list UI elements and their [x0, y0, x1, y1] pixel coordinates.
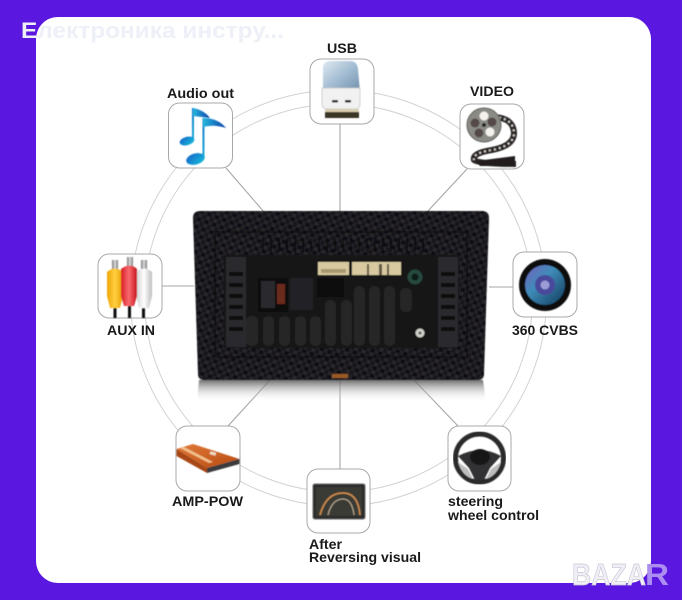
left clip column: [226, 257, 246, 347]
card: AMP-POW: [172, 426, 244, 509]
card: After Reversing visual: [307, 469, 421, 565]
antenna round jack: [408, 270, 422, 284]
concentric connection rings: [130, 90, 546, 506]
icon: USB stick: [322, 61, 360, 118]
card: USB: [310, 40, 374, 124]
cable clips: [246, 286, 412, 346]
coax socket: [416, 328, 424, 338]
label: AUX IN: AUX IN: [107, 322, 155, 338]
right clip column: [438, 257, 458, 347]
watermark: Bazar logo: R: [645, 557, 669, 592]
icon: steering wheel: [456, 434, 504, 482]
card: steering wheel control: [447, 426, 539, 523]
small square port: [317, 278, 344, 297]
icon: music notes: [179, 108, 226, 167]
card: VIDEO: [460, 83, 524, 169]
label: VIDEO: VIDEO: [470, 83, 514, 99]
icon: RCA plugs: [107, 257, 152, 318]
icon: film reel: [467, 108, 516, 166]
card: AUX IN: [98, 254, 162, 338]
connector lines: [162, 124, 513, 469]
label: After Reversing visual: Reversing visual: [309, 549, 421, 565]
icon: reversing camera screen: [313, 484, 365, 519]
label: steering wheel control: [447, 493, 539, 523]
multi-pin block with red plug: [258, 278, 288, 312]
head unit rear panel: [193, 211, 489, 402]
mounting frame: [215, 232, 467, 357]
title: Електроника инстру...: [21, 18, 284, 43]
icon: camera lens: [519, 259, 571, 311]
watermark: Bazar logo: BAZA: [572, 557, 646, 592]
bottom notch label: [332, 374, 348, 378]
vent row: [262, 238, 430, 252]
card: Audio out: [167, 85, 234, 168]
device reflection: [197, 380, 486, 402]
label: steering wheel control: steering: [448, 493, 503, 509]
label: After Reversing visual: After: [309, 536, 343, 552]
label: steering wheel control: wheel control: [447, 507, 539, 523]
label: Audio out: Audio out: [167, 85, 234, 101]
device body: [193, 211, 489, 380]
label: 360 CVBS: 360 CVBS: [512, 322, 578, 338]
card: 360 CVBS: [512, 252, 578, 338]
label: USB: USB: [327, 40, 357, 56]
label: AMP-POW: AMP-POW: [172, 493, 244, 509]
icon: amplifier: [176, 444, 240, 473]
inner connector bay: [224, 255, 459, 348]
grey port block: [290, 278, 313, 310]
cream wiring connectors: [318, 262, 401, 275]
label: After Reversing visual: [309, 536, 421, 565]
